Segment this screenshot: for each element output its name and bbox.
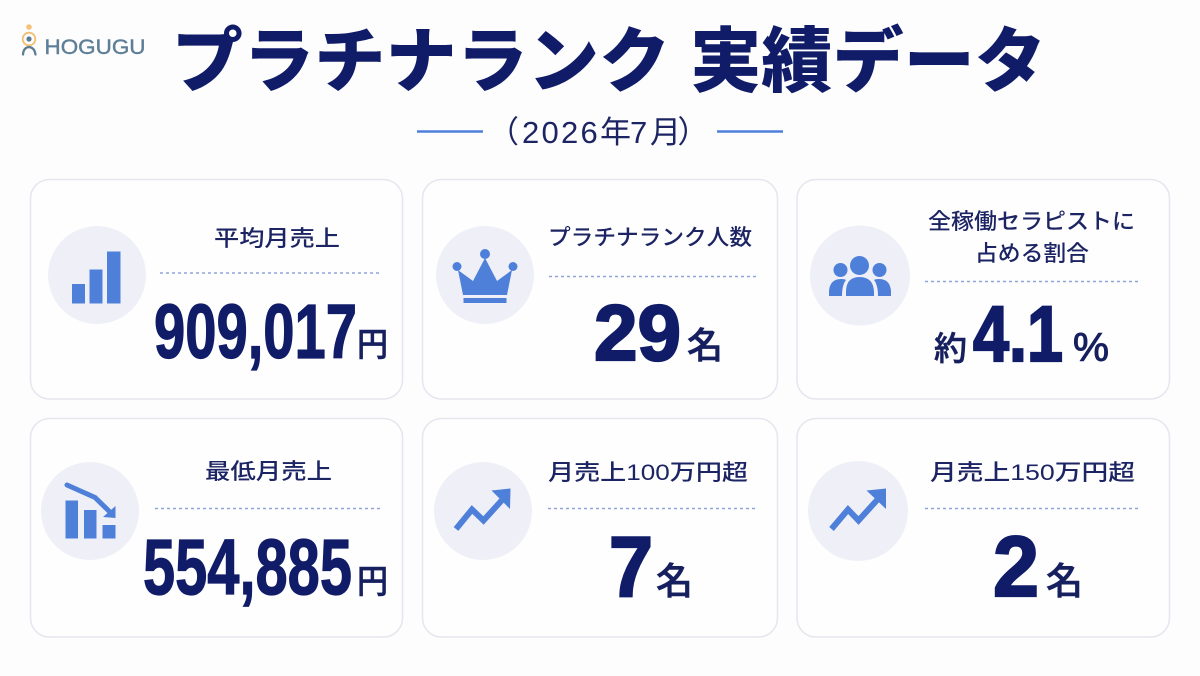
value: about 4.1 percent: % — [1073, 326, 1109, 370]
label: lowest monthly sales: 最低月売上 — [205, 459, 332, 484]
value: 909,017 yen: 909,017 — [154, 289, 357, 375]
value: 7 people: 名 — [656, 561, 693, 602]
icon: group of people — [810, 226, 910, 326]
panel: platinum rank headcount — [422, 180, 778, 399]
logo: HOGUGU: HOGUGU — [44, 36, 146, 59]
panel: over 1,500,000 yen per month — [797, 418, 1170, 637]
label: share of all active therapists — [928, 209, 1135, 266]
value: 2 people: 名 — [1046, 561, 1083, 602]
label: over 1,000,000 yen per month: 月売上100万円超 — [548, 460, 748, 485]
subtitle with rules: （2026年7月） — [488, 115, 708, 150]
panel: lowest monthly sales — [30, 418, 402, 637]
label: share of all active therapists: 全稼働セラピストに — [928, 209, 1135, 234]
value: 554,885 yen: 円 — [357, 563, 388, 600]
value: 2 people — [993, 520, 1083, 615]
label: over 1,500,000 yen per month: 月売上150万円超 — [930, 460, 1135, 485]
label: average monthly sales: 平均月売上 — [214, 226, 340, 251]
value: 2 people: 2 — [993, 520, 1039, 615]
icon: crown — [436, 226, 534, 324]
panel: share of all active therapists — [797, 180, 1170, 399]
value: about 4.1 percent — [934, 289, 1109, 378]
logo: HOGUGU — [23, 24, 146, 59]
value: 554,885 yen: 554,885 — [143, 522, 352, 611]
icon: bar chart rising — [48, 226, 146, 324]
icon: falling bar chart — [41, 462, 139, 560]
value: about 4.1 percent: 4.1 — [973, 289, 1063, 378]
value: 7 people — [609, 520, 693, 615]
value: 7 people: 7 — [609, 520, 653, 615]
icon: rising trend arrow — [808, 461, 908, 561]
title: プラチナランク 実績データ — [172, 23, 1046, 102]
value: 909,017 yen: 円 — [357, 326, 388, 363]
panel: average monthly sales — [30, 180, 402, 399]
panel: over 1,000,000 yen per month — [422, 418, 778, 637]
value: 29 people — [594, 288, 723, 377]
icon: rising trend arrow — [434, 462, 532, 560]
value: about 4.1 percent: 約 — [934, 330, 967, 367]
label: share of all active therapists: 占める割合 — [975, 241, 1089, 266]
label: platinum rank headcount: プラチナランク人数 — [548, 225, 752, 250]
value: 29 people: 名 — [687, 325, 723, 366]
value: 29 people: 29 — [594, 288, 681, 377]
